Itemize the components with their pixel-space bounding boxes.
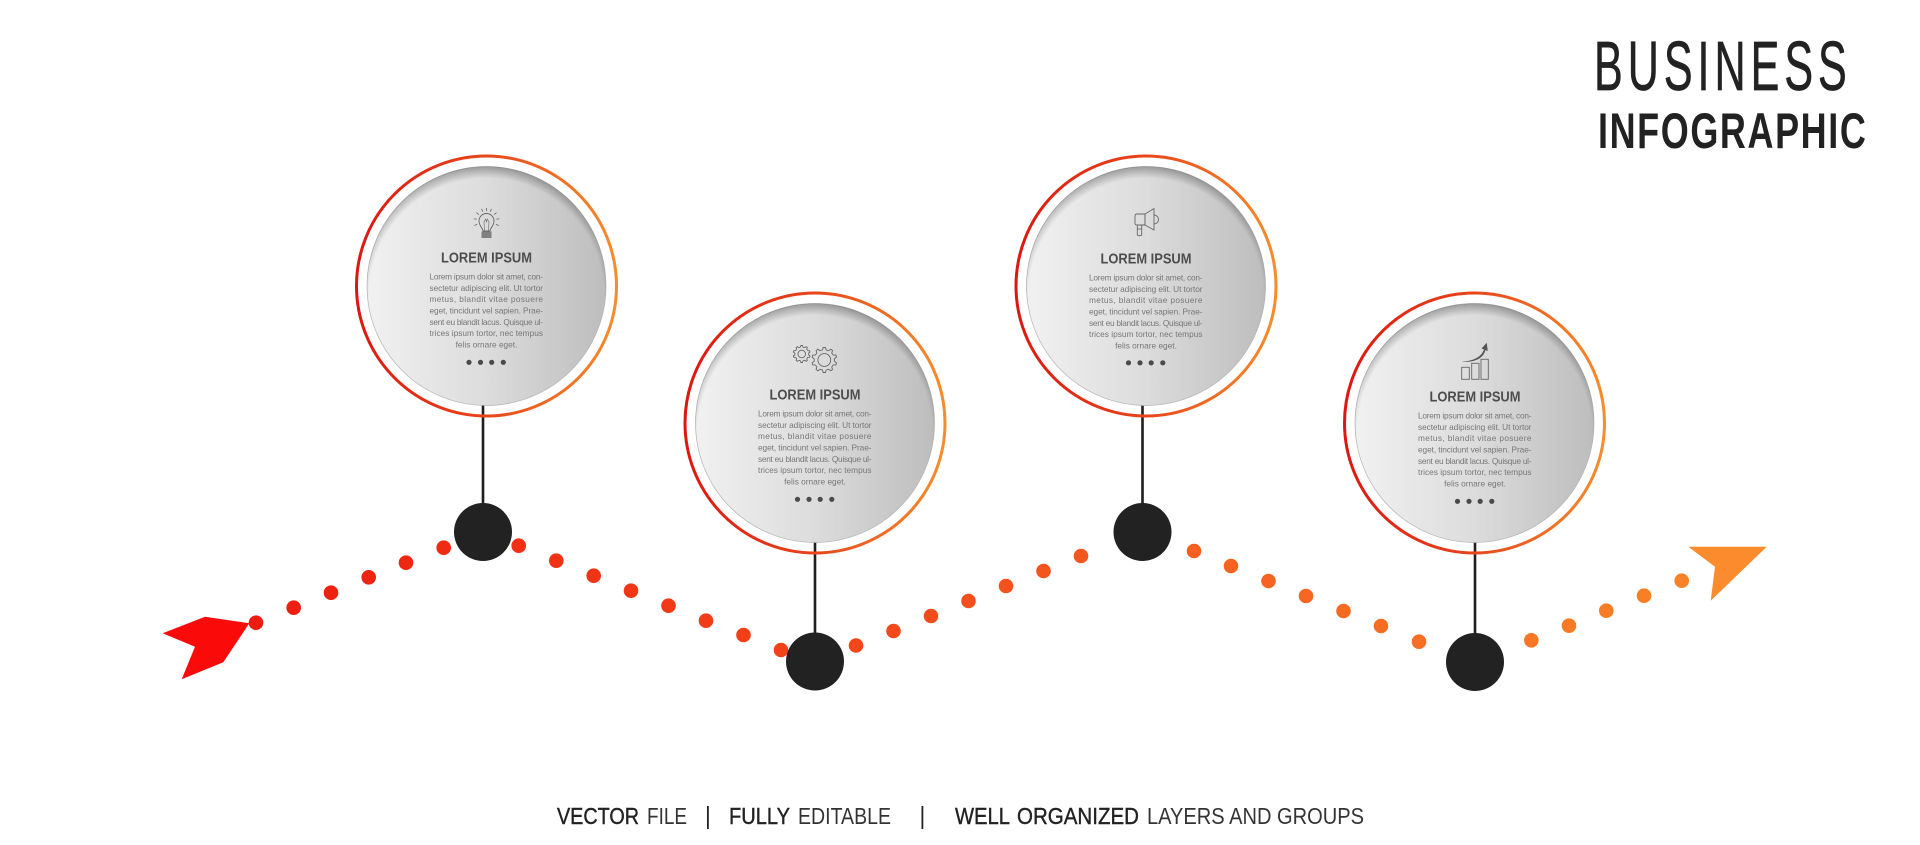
connector line and pin 2 bbox=[786, 541, 844, 690]
title: INFOGRAPHIC bbox=[1598, 104, 1866, 159]
dots 1 bbox=[466, 360, 506, 365]
body text 1: trices ipsum tortor, nec tempus bbox=[430, 328, 543, 338]
body text 4: sectetur adipiscing elit. Ut tortor bbox=[1418, 422, 1532, 432]
dots 2 bbox=[795, 497, 834, 502]
body text 4 bbox=[1418, 410, 1532, 488]
connector line and pin 3 bbox=[1114, 404, 1172, 561]
body text 4: metus, blandit vitae posuere bbox=[1418, 433, 1532, 443]
panel: step 3 bbox=[1016, 156, 1276, 561]
body text 2: sectetur adipiscing elit. Ut tortor bbox=[758, 420, 872, 430]
footer tagline: FILE bbox=[647, 803, 687, 829]
body text 4: trices ipsum tortor, nec tempus bbox=[1418, 467, 1532, 477]
connector line and pin 4 bbox=[1446, 541, 1504, 691]
dotted path bbox=[249, 538, 1689, 657]
body text 3 bbox=[1089, 272, 1203, 350]
footer tagline: EDITABLE bbox=[798, 803, 891, 829]
body text 1: sent eu blandit lacus. Quisque ul- bbox=[430, 317, 543, 327]
footer tagline: FULLY bbox=[729, 803, 790, 829]
arrow tail: red bbox=[163, 617, 249, 679]
circle card 1 bbox=[356, 156, 616, 416]
body text 1: felis ornare eget. bbox=[456, 340, 517, 350]
body text 4: eget, tincidunt vel sapien. Prae- bbox=[1418, 444, 1532, 454]
footer tagline: LAYERS AND GROUPS bbox=[1147, 803, 1364, 829]
heading 3: LOREM IPSUM bbox=[1100, 251, 1192, 268]
circle card 2 bbox=[685, 293, 945, 553]
footer tagline: ORGANIZED bbox=[1017, 803, 1139, 829]
panel: step 4 bbox=[1344, 293, 1604, 691]
title: BUSINESS bbox=[1594, 27, 1847, 106]
title bbox=[1594, 27, 1866, 159]
body text 4: felis ornare eget. bbox=[1444, 478, 1506, 488]
body text 3: trices ipsum tortor, nec tempus bbox=[1089, 329, 1202, 339]
circle card 3 bbox=[1016, 156, 1276, 416]
arrow head: orange bbox=[1688, 547, 1767, 601]
body text 3: felis ornare eget. bbox=[1115, 340, 1177, 350]
dots 4 bbox=[1455, 499, 1494, 504]
footer tagline bbox=[557, 803, 1364, 829]
body text 3: eget, tincidunt vel sapien. Prae- bbox=[1089, 306, 1203, 316]
dots 3 bbox=[1126, 360, 1165, 365]
panel: step 2 bbox=[685, 293, 945, 690]
body text 1: eget, tincidunt vel sapien. Prae- bbox=[430, 306, 543, 316]
body text 1: Lorem ipsum dolor sit amet, con- bbox=[430, 272, 543, 282]
heading 1: LOREM IPSUM bbox=[441, 250, 532, 267]
body text 3: metus, blandit vitae posuere bbox=[1089, 295, 1203, 305]
body text 2: sent eu blandit lacus. Quisque ul- bbox=[758, 454, 872, 464]
body text 3: sectetur adipiscing elit. Ut tortor bbox=[1089, 284, 1203, 294]
connector line and pin 1 bbox=[454, 404, 512, 561]
body text 2 bbox=[758, 408, 872, 486]
body text 2: eget, tincidunt vel sapien. Prae- bbox=[758, 442, 872, 452]
body text 2: Lorem ipsum dolor sit amet, con- bbox=[758, 408, 872, 418]
heading 2: LOREM IPSUM bbox=[770, 387, 860, 404]
panel: step 1 bbox=[356, 156, 616, 561]
icon: gears bbox=[793, 345, 838, 373]
body text 1: sectetur adipiscing elit. Ut tortor bbox=[430, 283, 543, 293]
circle card 4 bbox=[1344, 293, 1604, 553]
body text 4: Lorem ipsum dolor sit amet, con- bbox=[1418, 410, 1532, 420]
footer tagline: WELL bbox=[955, 803, 1010, 829]
icon: growth chart bbox=[1462, 343, 1488, 379]
icon: megaphone bbox=[1135, 208, 1158, 236]
body text 1: metus, blandit vitae posuere bbox=[430, 294, 543, 304]
body text 1 bbox=[430, 272, 543, 350]
body text 2: trices ipsum tortor, nec tempus bbox=[758, 465, 872, 475]
footer tagline: VECTOR bbox=[557, 803, 639, 829]
icon: light bulb bbox=[474, 208, 499, 238]
body text 3: sent eu blandit lacus. Quisque ul- bbox=[1089, 318, 1203, 328]
body text 4: sent eu blandit lacus. Quisque ul- bbox=[1418, 456, 1532, 466]
body text 3: Lorem ipsum dolor sit amet, con- bbox=[1089, 272, 1203, 282]
body text 2: metus, blandit vitae posuere bbox=[758, 431, 872, 441]
heading 4: LOREM IPSUM bbox=[1430, 389, 1520, 406]
body text 2: felis ornare eget. bbox=[784, 476, 846, 486]
